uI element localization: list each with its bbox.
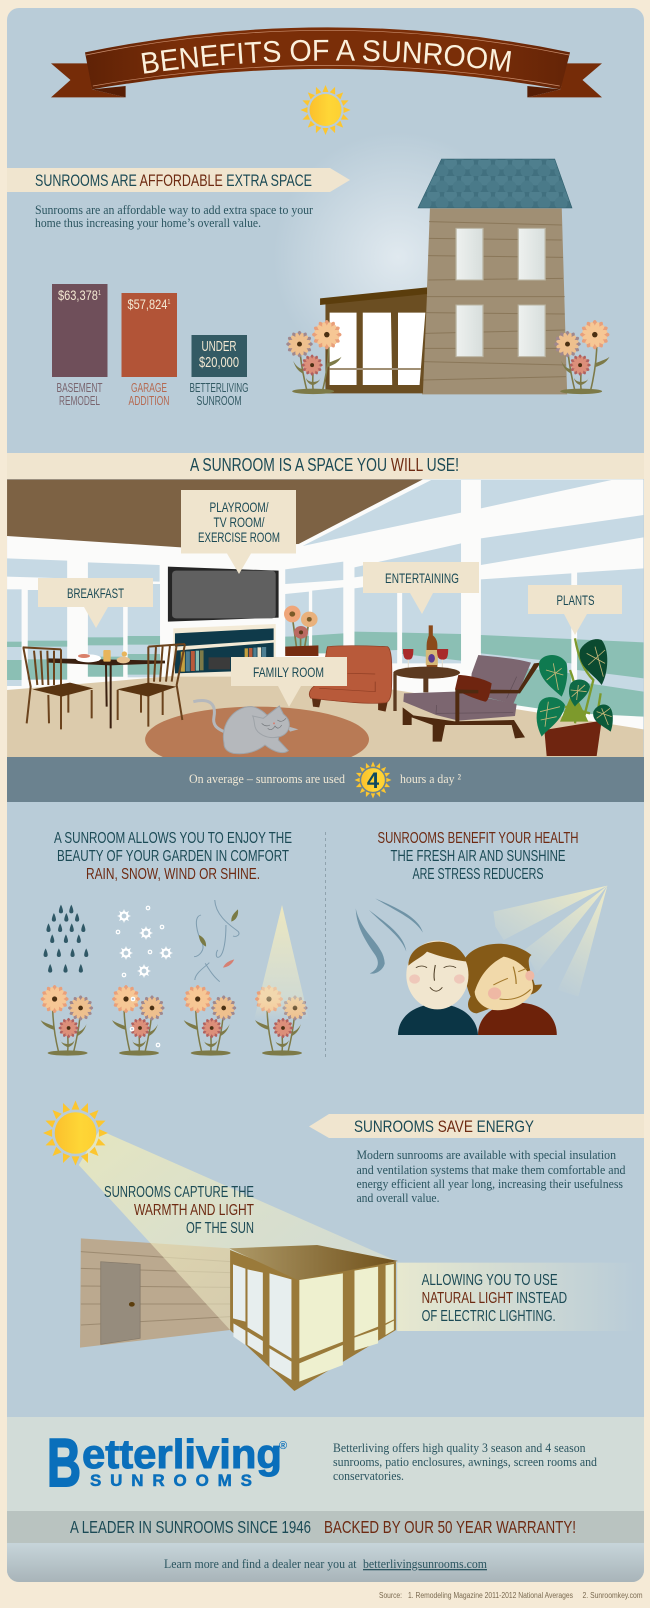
ribbon: save energy heading <box>309 1114 644 1138</box>
text: energy body <box>356 1148 626 1205</box>
callout: breakfast <box>38 578 153 628</box>
panel: company footer <box>7 1417 644 1582</box>
people with sun rays <box>356 886 607 1035</box>
cat <box>193 700 298 754</box>
bar chart: cost comparison <box>52 284 248 408</box>
bar: basement remodel: BASEMENT <box>56 381 103 395</box>
house wall <box>80 1238 230 1348</box>
bar: basement remodel: REMODEL <box>59 394 100 408</box>
text: energy body: energy efficient all year long, increasing their usefulness <box>356 1177 623 1191</box>
callout: playroom: TV ROOM/ <box>214 514 265 530</box>
callout: entertaining: ENTERTAINING <box>385 570 459 586</box>
sunlight beam <box>79 1130 398 1330</box>
house roof <box>418 159 572 208</box>
bar: garage addition: 1 <box>167 299 171 306</box>
wind strokes <box>356 898 423 974</box>
callout: playroom <box>181 490 296 574</box>
text: capture warmth: SUNROOMS CAPTURE THE <box>104 1184 254 1201</box>
logo: SUNROOMS <box>90 1471 252 1490</box>
dining set and cat <box>23 644 298 754</box>
text: affordable body: Sunrooms are an affordable way to add extra space to your <box>35 203 314 217</box>
wine glasses and bottle <box>403 625 448 673</box>
bar: betterliving sunroom: BETTERLIVING <box>190 381 248 395</box>
title: BENEFITS OF A SUNROOM <box>142 40 511 74</box>
woman <box>464 944 557 1035</box>
house body <box>422 208 567 394</box>
tv <box>168 567 279 622</box>
flowers left <box>285 319 343 394</box>
text: energy body: and ventilation systems that make them comfortable and <box>356 1163 626 1177</box>
sunroom <box>229 1245 398 1391</box>
media shelf <box>173 624 276 677</box>
icon: sun <box>300 85 350 135</box>
lounge chair <box>403 655 541 742</box>
title banner <box>51 27 602 98</box>
band: warranty: A LEADER IN SUNROOMS SINCE 1946 <box>70 1517 311 1537</box>
bar: betterliving sunroom: UNDER <box>202 338 237 355</box>
bar: basement remodel: 1 <box>98 290 101 297</box>
text: affordable body <box>35 203 314 230</box>
band: warranty <box>7 1511 644 1543</box>
bar: garage addition: $57,824 <box>128 296 178 312</box>
bar: betterliving sunroom: SUNROOM <box>196 394 242 408</box>
heading: garden <box>54 830 292 883</box>
bar: garage addition: GARAGE <box>131 381 167 395</box>
vase of flowers <box>284 606 318 656</box>
bar: betterliving sunroom: $20,000 <box>199 354 239 371</box>
heading: garden: BEAUTY OF YOUR GARDEN IN COMFORT <box>57 848 289 865</box>
icon: wind <box>194 900 239 982</box>
band: learn more: Learn more and find a dealer near you at <box>164 1556 357 1571</box>
callout: playroom: PLAYROOM/ <box>210 499 269 515</box>
text: natural light: NATURAL LIGHT INSTEAD <box>422 1290 567 1307</box>
flowers: four clusters <box>40 984 309 1056</box>
logo: B <box>47 1425 81 1501</box>
text: natural light: OF ELECTRIC LIGHTING. <box>422 1308 556 1325</box>
logo: ® <box>279 1440 287 1452</box>
callout: playroom: EXERCISE ROOM <box>198 529 280 545</box>
logo <box>47 1425 287 1501</box>
text: capture warmth: WARMTH AND LIGHT <box>134 1202 254 1219</box>
orange armchair <box>309 646 392 712</box>
callout: plants: PLANTS <box>556 592 594 608</box>
bar: basement remodel: $63,378 <box>58 287 109 303</box>
house illustration <box>285 159 611 394</box>
text: capture warmth <box>104 1184 254 1237</box>
icon: snow <box>115 905 173 978</box>
heading: health: THE FRESH AIR AND SUNSHINE <box>390 848 566 865</box>
small sunroom <box>320 287 427 393</box>
bar: garage addition: ADDITION <box>128 394 170 408</box>
heading: garden: A SUNROOM ALLOWS YOU TO ENJOY THE <box>54 830 292 847</box>
band: learn more: betterlivingsunrooms.com <box>363 1556 487 1571</box>
callout: entertaining <box>363 562 479 614</box>
side table and lounge chair <box>393 638 613 756</box>
sun rays <box>493 886 607 997</box>
band: warranty: BACKED BY OUR 50 YEAR WARRANTY! <box>324 1517 576 1537</box>
ribbon: save energy heading: SUNROOMS SAVE ENERGY <box>354 1117 534 1136</box>
source notes: 1. Remodeling Magazine 2011-2012 National Averages <box>408 1591 573 1600</box>
text: capture warmth: OF THE SUN <box>186 1220 254 1237</box>
heading: health: SUNROOMS BENEFIT YOUR HEALTH <box>378 830 578 847</box>
man <box>398 941 478 1035</box>
icon: rain <box>44 905 88 973</box>
text: energy body: Modern sunrooms are available with special insulation <box>356 1148 617 1162</box>
house glow <box>270 130 530 390</box>
text: company description: Betterliving offers high quality 3 season and 4 season <box>333 1441 586 1455</box>
text: natural light <box>422 1272 567 1325</box>
bar: basement remodel <box>52 284 108 408</box>
text: company description: conservatories. <box>333 1469 404 1483</box>
windows <box>7 480 643 717</box>
bar: garage addition <box>122 293 177 408</box>
rug <box>145 706 369 757</box>
energy illustration <box>43 1100 638 1391</box>
band: will use heading: A SUNROOM IS A SPACE YOU WILL USE! <box>190 455 459 475</box>
heading: health <box>378 830 578 883</box>
source notes: Source: <box>379 1591 402 1600</box>
bar: betterliving sunroom <box>190 335 248 408</box>
heading: health: ARE STRESS REDUCERS <box>412 866 544 883</box>
side table <box>393 667 460 711</box>
snow on flowers <box>129 996 161 1048</box>
text: affordable body: home thus increasing your home’s overall value. <box>35 216 261 230</box>
wood ceiling <box>7 479 423 547</box>
text: company description <box>333 1441 598 1483</box>
icon: sun with 4: 4 <box>367 768 380 793</box>
ribbon: affordable heading: SUNROOMS ARE AFFORDABLE EXTRA SPACE <box>35 171 312 190</box>
callout: family room: FAMILY ROOM <box>253 664 324 680</box>
text: natural light: ALLOWING YOU TO USE <box>422 1272 558 1289</box>
flowers right <box>553 319 611 394</box>
floor <box>7 670 643 758</box>
plant <box>537 638 613 756</box>
text: company description: sunrooms, patio enclosures, awnings, screen rooms and <box>333 1455 598 1469</box>
logo: etterliving <box>82 1431 282 1477</box>
panel: sunroom interior scene <box>7 479 643 772</box>
light band <box>397 1263 638 1331</box>
callout: plants <box>528 585 622 635</box>
band: learn more <box>7 1543 644 1582</box>
band: four hours a day <box>7 757 644 802</box>
callout: family room <box>231 657 347 707</box>
band: four hours a day: hours a day ² <box>400 771 461 786</box>
icon: sun <box>43 1100 108 1166</box>
dining set <box>23 644 185 729</box>
band: four hours a day: On average – sunrooms are used <box>189 771 345 786</box>
band: will use heading <box>7 453 644 479</box>
heading: garden: RAIN, SNOW, WIND OR SHINE. <box>86 866 260 883</box>
icon: sun with 4 <box>354 762 392 798</box>
callout: breakfast: BREAKFAST <box>67 585 124 601</box>
light beam over flowers <box>254 905 309 1020</box>
text: energy body: and overall value. <box>356 1191 440 1205</box>
